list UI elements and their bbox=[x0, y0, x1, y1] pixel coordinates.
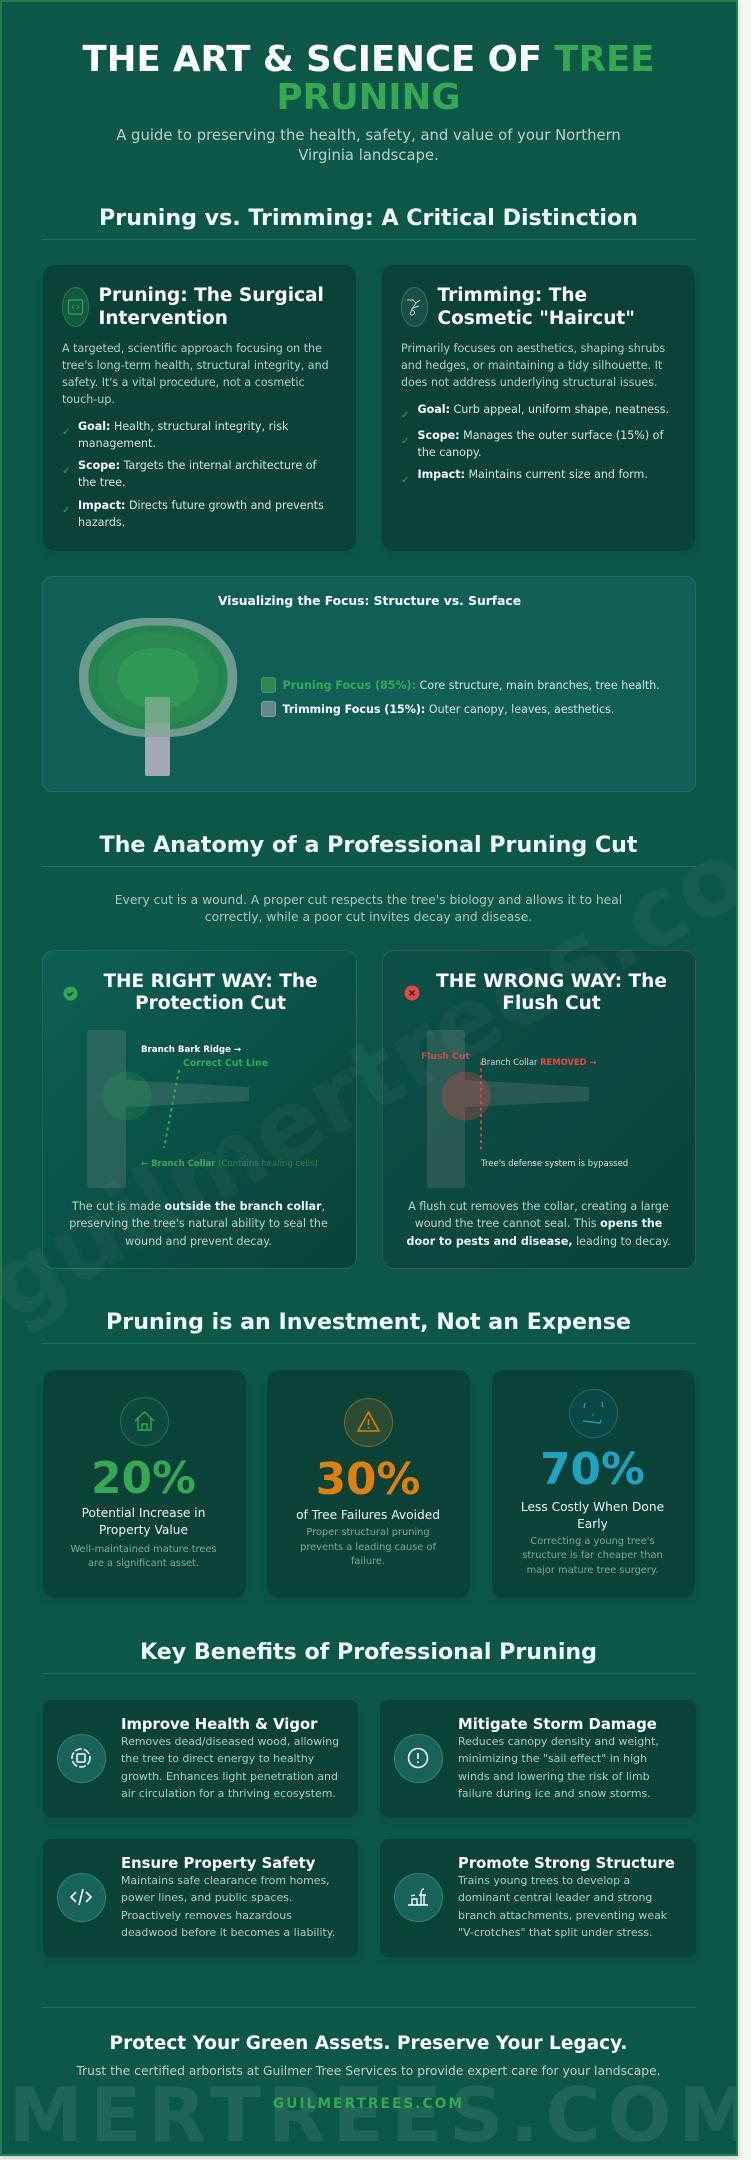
footer text: Trust the certified arborists at Guilmer Tree Services to provide expert care for your landscape. bbox=[76, 2064, 661, 2078]
text: structure: "V-crotches" that split under stress. bbox=[458, 1926, 652, 1939]
panel: trimming bbox=[382, 264, 694, 550]
label: property value: Property Value bbox=[99, 1523, 188, 1537]
title bbox=[82, 39, 654, 118]
title: PRUNING bbox=[277, 76, 460, 118]
icon: structure ring bbox=[394, 1873, 443, 1922]
diagram: protection cut: Correct Cut Line bbox=[182, 1058, 268, 1068]
footer heading: Protect Your Green Assets. Preserve Your Legacy. bbox=[110, 2032, 627, 2054]
checklist: pruning: Goal: Health, structural integrity, risk bbox=[78, 420, 288, 432]
checklist: pruning: management. bbox=[78, 437, 156, 450]
heading: wrong way bbox=[436, 970, 667, 1014]
text: right way description: wound and prevent decay. bbox=[125, 1235, 272, 1248]
heading: pruning: Intervention bbox=[98, 308, 228, 329]
text: storm: Reduces canopy density and weight, bbox=[458, 1735, 659, 1748]
chart: tree diagram bbox=[79, 618, 237, 776]
text: trimming description: Primarily focuses on aesthetics, shaping shrubs bbox=[401, 342, 665, 354]
diagram: flush cut: Branch Collar REMOVED → bbox=[480, 1056, 596, 1066]
text: wrong way description bbox=[407, 1200, 670, 1248]
text: wrong way description: A flush cut removes the collar, creating a large bbox=[408, 1200, 669, 1213]
panel: stat 70% bbox=[492, 1370, 694, 1598]
text: safety: Proactively removes hazardous bbox=[121, 1909, 292, 1922]
heading: right way: THE RIGHT WAY: The bbox=[103, 970, 318, 992]
text: pruning description: safety. It's a vital procedure, not a cosmetic bbox=[62, 376, 305, 389]
text: less costly detail: Correcting a young tree's bbox=[530, 1536, 655, 1546]
legend bbox=[261, 677, 660, 717]
heading: visualization: Visualizing the Focus: Structure vs. Surface bbox=[218, 594, 521, 608]
text: storm bbox=[458, 1735, 659, 1800]
label: tree failures: of Tree Failures Avoided bbox=[296, 1508, 440, 1522]
label: less costly: Less Costly When Done bbox=[521, 1500, 664, 1514]
heading: safety: Ensure Property Safety bbox=[121, 1854, 315, 1872]
diagram: protection cut: Branch Bark Ridge → bbox=[140, 1044, 241, 1054]
text: less costly detail: structure is far cheaper than bbox=[522, 1550, 663, 1561]
diagram: flush cut: Tree's defense system is bypassed bbox=[480, 1158, 628, 1168]
legend: Pruning Focus (85%): Core structure, main branches, tree health. bbox=[282, 678, 660, 692]
heading: storm: Mitigate Storm Damage bbox=[458, 1716, 657, 1732]
text: pruning description: tree's long-term health, structural integrity, and bbox=[62, 359, 329, 372]
panel: property safety bbox=[42, 1838, 358, 1956]
text: safety: deadwood before it becomes a liability. bbox=[121, 1926, 335, 1939]
text: structure bbox=[458, 1874, 667, 1939]
label: property value bbox=[82, 1506, 205, 1537]
number: 30%: 30% bbox=[316, 1454, 420, 1505]
title: THE ART & SCIENCE OF TREE bbox=[83, 39, 654, 80]
number: 70%: 70% bbox=[540, 1444, 645, 1495]
text: storm: minimizing the "sail effect" in high bbox=[458, 1752, 647, 1765]
heading: trimming: Cosmetic "Haircut" bbox=[438, 308, 635, 329]
checklist: pruning: hazards. bbox=[78, 516, 125, 529]
text: property value detail: Well-maintained mature trees bbox=[70, 1544, 217, 1554]
text: tree failures detail bbox=[300, 1527, 436, 1567]
icon: warning bbox=[344, 1398, 393, 1447]
text: property value detail: are a significant asset. bbox=[88, 1558, 199, 1569]
icon: chip ring bbox=[56, 1734, 106, 1783]
text: wrong way description: wound the tree cannot seal. This opens the bbox=[415, 1217, 662, 1230]
checklist: trimming: Scope: Manages the outer surface (15%) of bbox=[418, 428, 663, 442]
number: 20%: 20% bbox=[91, 1452, 196, 1504]
text: pruning description: A targeted, scientific approach focusing on the bbox=[62, 342, 322, 354]
icon: check badge bbox=[64, 986, 78, 1000]
panel: strong structure bbox=[380, 1838, 696, 1956]
text: right way description bbox=[69, 1200, 328, 1248]
checklist: pruning: the tree. bbox=[78, 476, 126, 489]
checklist: pruning: Scope: Targets the internal architecture of bbox=[78, 459, 316, 472]
diagram: protection cut bbox=[87, 1030, 318, 1188]
panel: wrong way bbox=[382, 950, 696, 1268]
legend: Trimming Focus (15%): Outer canopy, leaves, aesthetics. bbox=[282, 702, 614, 716]
icon: x badge bbox=[404, 986, 420, 1000]
heading: wrong way: Flush Cut bbox=[502, 993, 601, 1014]
text: health: the tree to direct energy to healthy bbox=[121, 1752, 314, 1765]
checklist: trimming: ✓ bbox=[401, 474, 409, 486]
diagram: protection cut: ← Branch Collar (Contains healing cells) bbox=[140, 1158, 317, 1168]
text: tree failures detail: failure. bbox=[351, 1556, 385, 1567]
panel: stat 20% bbox=[42, 1370, 246, 1598]
subtitle: A guide to preserving the health, safety, and value of your Northern bbox=[116, 126, 621, 144]
icon: house bbox=[120, 1397, 169, 1446]
subtitle: Virginia landscape. bbox=[298, 146, 439, 164]
heading: anatomy: The Anatomy of a Professional Pruning Cut bbox=[100, 832, 637, 858]
text: structure: Trains young trees to develop a bbox=[458, 1874, 630, 1887]
text: health: air circulation for a thriving ecosystem. bbox=[121, 1787, 336, 1800]
checklist: trimming bbox=[401, 402, 669, 486]
checklist: trimming: ✓ bbox=[401, 436, 409, 446]
panel: health and vigor bbox=[42, 1700, 358, 1816]
heading: benefits: Key Benefits of Professional Pruning bbox=[140, 1639, 597, 1665]
heading: pruning: Pruning: The Surgical bbox=[98, 285, 324, 306]
text: less costly detail: major mature tree surgery. bbox=[527, 1565, 658, 1576]
icon: alert ring bbox=[394, 1734, 443, 1783]
text: trimming description: and hedges, or maintaining a tidy silhouette. It bbox=[401, 359, 662, 372]
panel: stat 30% bbox=[266, 1370, 470, 1598]
heading: pruning bbox=[98, 285, 324, 329]
text: safety: Maintains safe clearance from homes, bbox=[121, 1874, 330, 1887]
icon: code ring bbox=[56, 1873, 106, 1922]
text: property value detail bbox=[70, 1544, 217, 1569]
text: trimming description bbox=[401, 342, 665, 389]
heading: right way: Protection Cut bbox=[135, 993, 286, 1014]
heading: right way bbox=[103, 970, 318, 1014]
icon: face marks bbox=[569, 1389, 618, 1438]
checklist: pruning bbox=[62, 420, 324, 529]
text: storm: failure during ice and snow storms. bbox=[458, 1787, 651, 1800]
icon: trimming bbox=[401, 287, 428, 327]
text: tree failures detail: prevents a leading cause of bbox=[300, 1542, 436, 1553]
heading: investment: Pruning is an Investment, Not an Expense bbox=[106, 1309, 631, 1335]
panel: pruning bbox=[42, 264, 356, 550]
heading: trimming bbox=[438, 285, 635, 329]
text: tree failures detail: Proper structural pruning bbox=[306, 1527, 430, 1538]
text: structure: branch attachments, preventing weak bbox=[458, 1909, 667, 1922]
panel: right way bbox=[42, 950, 356, 1268]
label: less costly bbox=[521, 1500, 664, 1531]
text: right way description: preserving the tree's natural ability to seal the bbox=[69, 1217, 328, 1230]
text: health: Removes dead/diseased wood, allowing bbox=[121, 1735, 339, 1748]
checklist: trimming: Goal: Curb appeal, uniform shape, neatness. bbox=[418, 402, 669, 416]
panel: focus visualization bbox=[42, 576, 696, 792]
text: trimming description: does not address underlying structural issues. bbox=[401, 376, 658, 389]
checklist: pruning: Impact: Directs future growth and prevents bbox=[78, 498, 324, 512]
subtitle bbox=[116, 126, 621, 164]
text: safety: power lines, and public spaces. bbox=[121, 1891, 292, 1904]
text: structure: dominant central leader and strong bbox=[458, 1891, 652, 1904]
text: safety bbox=[121, 1874, 335, 1939]
label: less costly: Early bbox=[577, 1517, 608, 1531]
text: health: growth. Enhances light penetration and bbox=[121, 1770, 338, 1783]
checklist: trimming: the canopy. bbox=[418, 446, 482, 459]
diagram: flush cut: Flush Cut bbox=[420, 1050, 470, 1062]
text: anatomy intro: Every cut is a wound. A proper cut respects the tree's biology and allows it to heal bbox=[115, 892, 622, 906]
heading: wrong way: THE WRONG WAY: The bbox=[436, 970, 667, 992]
heading: structure: Promote Strong Structure bbox=[458, 1854, 675, 1872]
icon: pruning bbox=[62, 287, 89, 327]
checklist: pruning: ✓ bbox=[62, 466, 70, 476]
checklist: trimming: Impact: Maintains current size and form. bbox=[418, 468, 648, 481]
text: anatomy intro: correctly, while a poor cut invites decay and disease. bbox=[205, 910, 532, 924]
text: health bbox=[121, 1735, 339, 1800]
panel: storm damage bbox=[380, 1700, 696, 1816]
checklist: pruning: ✓ bbox=[62, 504, 70, 516]
heading: health: Improve Health & Vigor bbox=[121, 1716, 317, 1732]
label: property value: Potential Increase in bbox=[82, 1506, 205, 1520]
heading: pruning vs trimming: Pruning vs. Trimming: A Critical Distinction bbox=[99, 204, 638, 230]
checklist: pruning: ✓ bbox=[62, 426, 70, 438]
text: less costly detail bbox=[522, 1536, 663, 1576]
text: pruning description: touch-up. bbox=[62, 393, 115, 406]
heading: trimming: Trimming: The bbox=[438, 285, 587, 306]
text: right way description: The cut is made outside the branch collar, bbox=[72, 1200, 325, 1213]
checklist: trimming: ✓ bbox=[401, 410, 409, 420]
text: wrong way description: door to pests and disease, leading to decay. bbox=[407, 1235, 670, 1248]
text: pruning description bbox=[62, 342, 329, 406]
text: storm: winds and lowering the risk of limb bbox=[458, 1770, 650, 1783]
footer link: GUILMERTREES.COM bbox=[273, 2096, 464, 2112]
text: anatomy intro bbox=[115, 892, 622, 924]
diagram: flush cut bbox=[420, 1030, 628, 1188]
